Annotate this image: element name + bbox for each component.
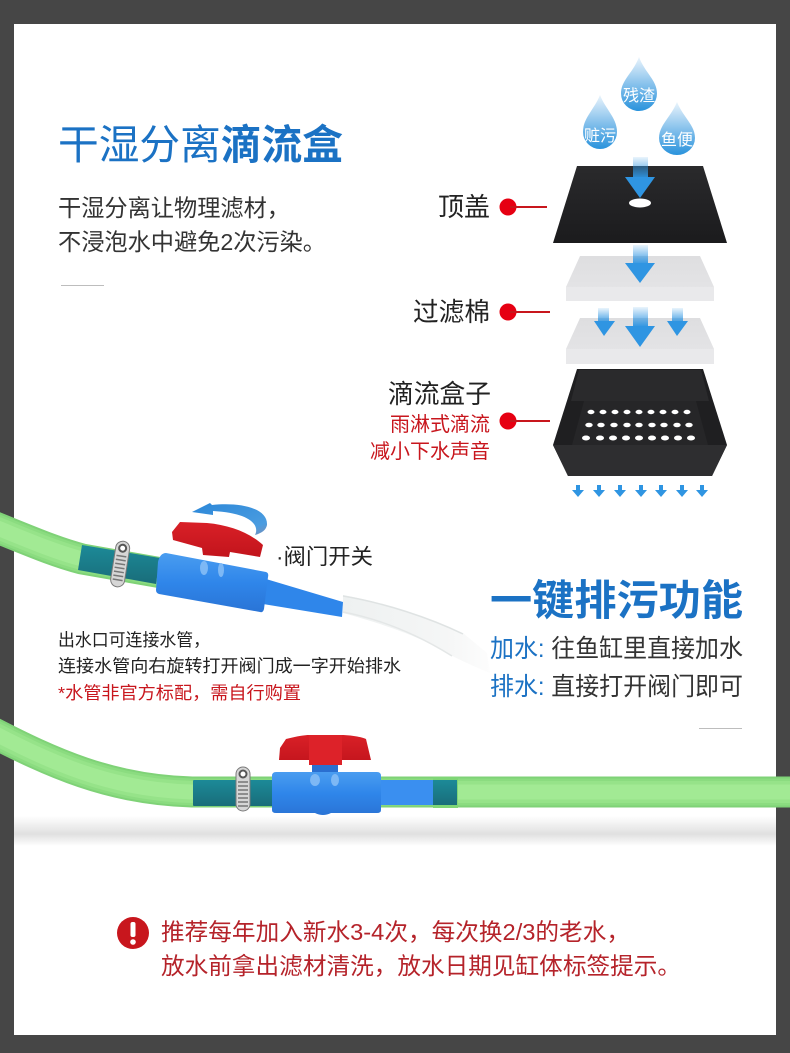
arrows through foam 2 bbox=[594, 307, 688, 347]
small arrows below box bbox=[572, 485, 708, 497]
intro text: 不浸泡水中避免2次污染。 bbox=[58, 229, 326, 255]
inner connector left bbox=[193, 780, 273, 806]
hose clamp bbox=[110, 540, 131, 588]
label: 滴流盒子 bbox=[370, 379, 550, 463]
label: 滴流盒子: 滴流盒子 bbox=[388, 379, 491, 409]
add water / drain text: 排水: 直接打开阀门即可 bbox=[490, 673, 743, 701]
hose instructions: 连接水管向右旋转打开阀门成一字开始排水 bbox=[58, 656, 402, 676]
label: 顶盖 bbox=[438, 192, 547, 222]
red handle bbox=[279, 735, 371, 765]
label: 滴流盒子: 雨淋式滴流 bbox=[390, 413, 490, 436]
hose instructions bbox=[58, 630, 402, 703]
warning note bbox=[117, 917, 681, 979]
green hose bbox=[0, 731, 790, 792]
hose clamp bbox=[236, 767, 250, 811]
drop: 赃污: 赃污 bbox=[584, 127, 616, 145]
drop: 鱼便: 鱼便 bbox=[661, 131, 693, 149]
blue pipe bbox=[380, 780, 434, 805]
valve highlights bbox=[200, 561, 224, 577]
blue valve body bbox=[156, 553, 268, 612]
heading: one-key flush: 一键排污功能 bbox=[490, 577, 743, 624]
label: 顶盖: 顶盖 bbox=[438, 192, 490, 222]
blue valve body bbox=[272, 772, 381, 815]
add water / drain text bbox=[490, 635, 743, 701]
label: 过滤棉: 过滤棉 bbox=[413, 297, 490, 327]
drip box bbox=[553, 369, 727, 476]
drip holes bbox=[582, 410, 695, 440]
add water / drain text: 加水: 往鱼缸里直接加水 bbox=[490, 635, 743, 663]
hose instructions: *水管非官方标配，需自行购置 bbox=[58, 683, 301, 703]
rotation arrow bbox=[192, 503, 267, 535]
green hose bbox=[0, 525, 162, 573]
icon: exclamation bbox=[117, 917, 149, 949]
title: 干湿分离滴流盒 bbox=[58, 122, 343, 168]
foam layer 2 bbox=[566, 318, 714, 364]
foam layer 1 bbox=[566, 256, 714, 301]
valve highlights bbox=[310, 774, 339, 786]
connector right bbox=[433, 780, 457, 805]
open valve with hose bbox=[0, 503, 490, 673]
arrow into cover bbox=[625, 157, 655, 198]
intro text: 干湿分离让物理滤材， bbox=[58, 195, 290, 221]
label: 过滤棉 bbox=[413, 297, 550, 327]
clear water stream bbox=[343, 595, 490, 673]
label: 滴流盒子: 减小下水声音 bbox=[370, 440, 490, 463]
floor shadow bbox=[14, 816, 776, 846]
warning note: 推荐每年加入新水3-4次，每次换2/3的老水， bbox=[161, 919, 630, 945]
drop: 残渣: 残渣 bbox=[623, 87, 655, 105]
warning note: 放水前拿出滤材清洗，放水日期见缸体标签提示。 bbox=[161, 953, 681, 979]
blue valve neck bbox=[312, 764, 338, 773]
label: valve switch: ·阀门开关 bbox=[276, 545, 373, 569]
icon: water drops bbox=[583, 57, 695, 155]
blue spout bbox=[263, 579, 343, 617]
closed valve with hose bbox=[0, 731, 790, 815]
hose instructions: 出水口可连接水管， bbox=[58, 630, 210, 650]
arrow through foam 1 bbox=[625, 245, 655, 283]
top cover plate bbox=[553, 166, 727, 243]
intro text bbox=[58, 195, 326, 255]
inner connector bbox=[78, 545, 160, 584]
green collar bbox=[433, 777, 458, 808]
red handle bbox=[172, 522, 263, 557]
